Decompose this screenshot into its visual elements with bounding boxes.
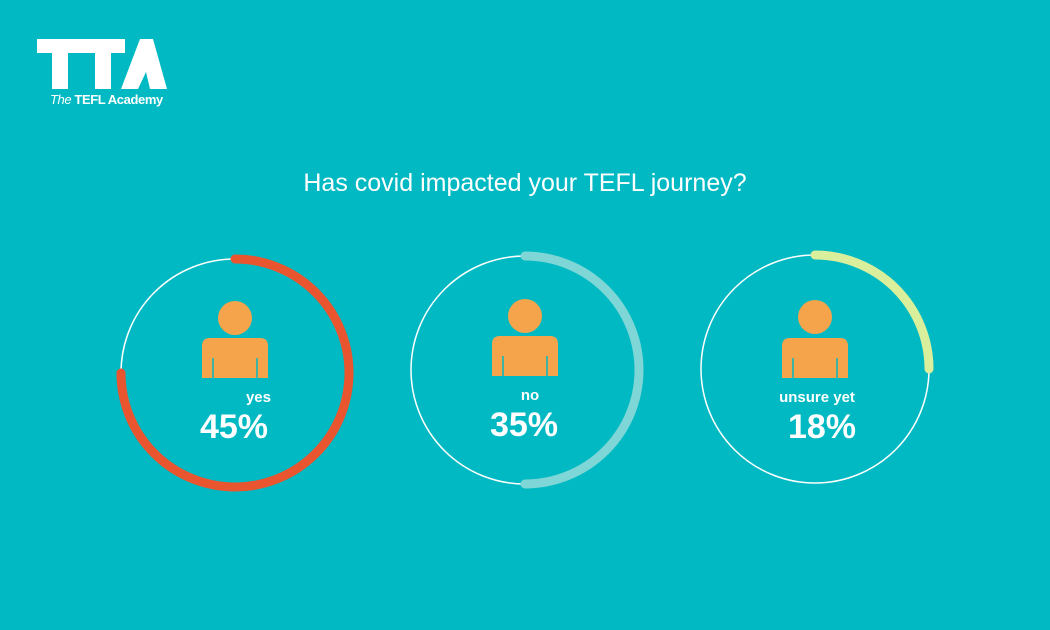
panel: yes [121,259,349,487]
logo: TTA letters [37,39,167,89]
panel: no [411,256,639,484]
icon: person [782,300,848,378]
ring: yes 45% [121,259,349,487]
ring: no 35% [525,256,639,484]
logo: tagline: The TEFL Academy [50,92,164,107]
value: 35%: 35% [490,406,558,444]
label: yes: yes [246,389,271,406]
logo [37,39,167,107]
icon: person [202,301,268,378]
label: no: no [521,387,539,404]
ring: unsure 18% [815,255,929,369]
value: 45%: 45% [200,408,268,446]
icon: person [492,299,558,376]
label: unsure yet: unsure yet [779,389,855,406]
panel: unsure yet [701,255,929,483]
title: Has covid impacted your TEFL journey? [303,169,747,197]
value: 18%: 18% [788,408,856,446]
